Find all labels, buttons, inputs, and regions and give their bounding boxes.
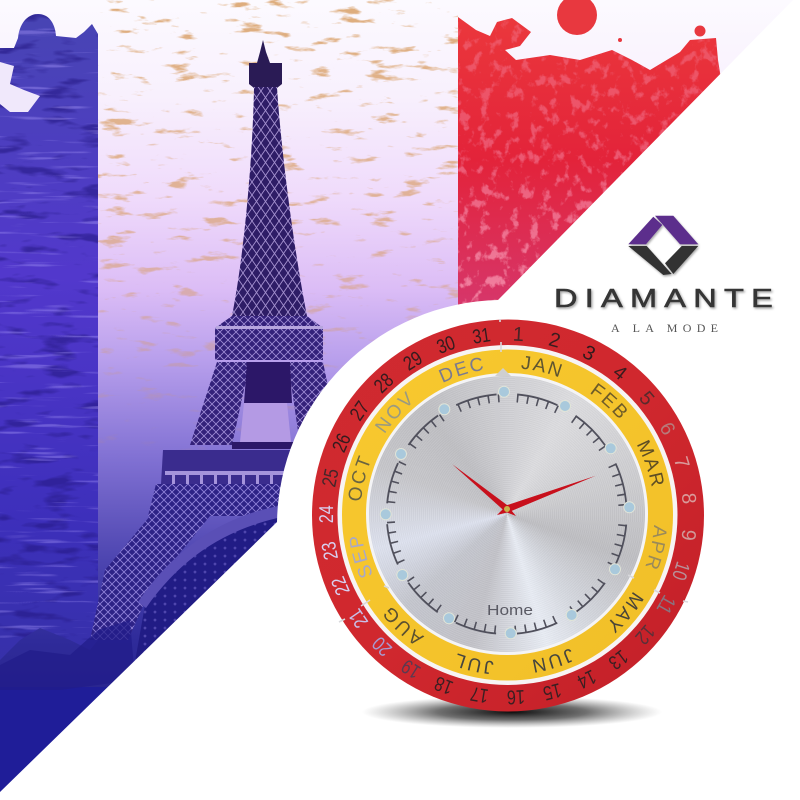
upper legs	[190, 362, 250, 445]
month names: DEC	[438, 358, 483, 382]
minute scale arcs	[377, 384, 637, 644]
date numbers 1 to 31: 14	[574, 665, 599, 692]
rust scratches on white band	[98, 0, 458, 460]
date numbers 1 to 31: 24	[316, 505, 338, 523]
date numbers 1 to 31: 19	[398, 654, 425, 683]
date numbers 1 to 31: 31	[471, 324, 492, 349]
month names: NOV	[374, 391, 410, 433]
balustrade arcade	[165, 471, 300, 485]
white gap ring	[338, 345, 678, 685]
month names: SEP	[350, 537, 372, 578]
month names: MAY	[610, 592, 644, 634]
calendar wall clock	[312, 319, 704, 712]
arch dark mass	[244, 362, 292, 403]
clock hands	[452, 464, 596, 516]
red splash droplets	[557, 0, 706, 42]
date numbers 1 to 31: 22	[328, 573, 355, 598]
month names: JUL	[457, 653, 494, 674]
dark foliage	[0, 620, 135, 690]
wall shadow under clock	[362, 696, 662, 728]
date numbers 1 to 31: 2	[546, 329, 563, 353]
first platform	[161, 450, 300, 484]
spire and top platform	[249, 40, 282, 88]
date numbers 1 to 31: 23	[318, 540, 343, 562]
date numbers 1 to 31: 16	[506, 685, 525, 708]
upper shaft	[232, 87, 307, 316]
logo: Diamante	[554, 216, 773, 335]
month names: APR	[646, 525, 667, 569]
arch lower sill	[232, 442, 300, 449]
month names: AUG	[384, 608, 424, 644]
date numbers 1 to 31: 7	[669, 454, 693, 471]
arch band	[138, 503, 298, 608]
tagline: A LA MODE	[611, 321, 718, 335]
date numbers 1 to 31: 21	[345, 604, 373, 632]
yellow month ring	[342, 350, 673, 680]
first level lattice	[148, 484, 300, 516]
white hole in blue splash	[0, 62, 40, 112]
date numbers 1 to 31: 10	[667, 559, 694, 583]
maker mark: Home	[487, 602, 533, 619]
ring slots and pins	[339, 319, 688, 622]
date numbers 1 to 31: 28	[370, 369, 398, 398]
date numbers 1 to 31: 12	[630, 620, 659, 648]
date numbers 1 to 31: 17	[469, 682, 490, 707]
date numbers 1 to 31: 11	[652, 591, 680, 618]
date numbers 1 to 31: 5	[634, 387, 658, 410]
logo diamond icon	[628, 216, 698, 275]
date numbers 1 to 31: 13	[604, 645, 632, 673]
date numbers 1 to 31: 18	[432, 671, 456, 698]
outer red date ring	[312, 320, 704, 712]
brushed silver disc	[369, 376, 645, 652]
centre pin	[504, 506, 510, 512]
date numbers 1 to 31: 6	[655, 419, 679, 439]
month names: MAR	[637, 440, 664, 486]
date numbers 1 to 31: 26	[328, 430, 356, 456]
date numbers 1 to 31: 1	[512, 323, 525, 346]
date numbers 1 to 31: 8	[677, 492, 700, 505]
month names: FEB	[590, 383, 627, 418]
deck edge	[216, 326, 323, 329]
date numbers 1 to 31: 25	[318, 467, 344, 489]
top pointer	[495, 368, 511, 376]
date numbers 1 to 31: 9	[676, 528, 699, 542]
lower left leg	[90, 516, 210, 640]
date numbers 1 to 31: 4	[609, 361, 631, 385]
arch light window	[240, 403, 291, 442]
month names: JUN	[532, 649, 572, 673]
under arch dark mass	[130, 514, 290, 690]
month names: OCT	[348, 455, 370, 500]
crystal hour markers	[380, 386, 635, 639]
date numbers 1 to 31: 3	[579, 341, 599, 366]
month names	[348, 356, 667, 674]
second platform	[215, 316, 323, 360]
blue flag band	[0, 0, 98, 690]
Eiffel Tower	[0, 40, 340, 690]
date numbers 1 to 31: 29	[400, 347, 427, 375]
date numbers 1 to 31	[316, 323, 700, 708]
date numbers 1 to 31: 15	[541, 678, 564, 704]
silver disc border	[366, 373, 648, 655]
date numbers 1 to 31: 27	[346, 397, 374, 425]
brand name: DIAMANTE	[554, 284, 773, 313]
bottom navy band	[0, 687, 300, 800]
red flag band	[458, 17, 720, 304]
date numbers 1 to 31: 20	[368, 632, 397, 660]
month names: JAN	[521, 356, 562, 377]
date numbers 1 to 31: 30	[434, 332, 458, 359]
